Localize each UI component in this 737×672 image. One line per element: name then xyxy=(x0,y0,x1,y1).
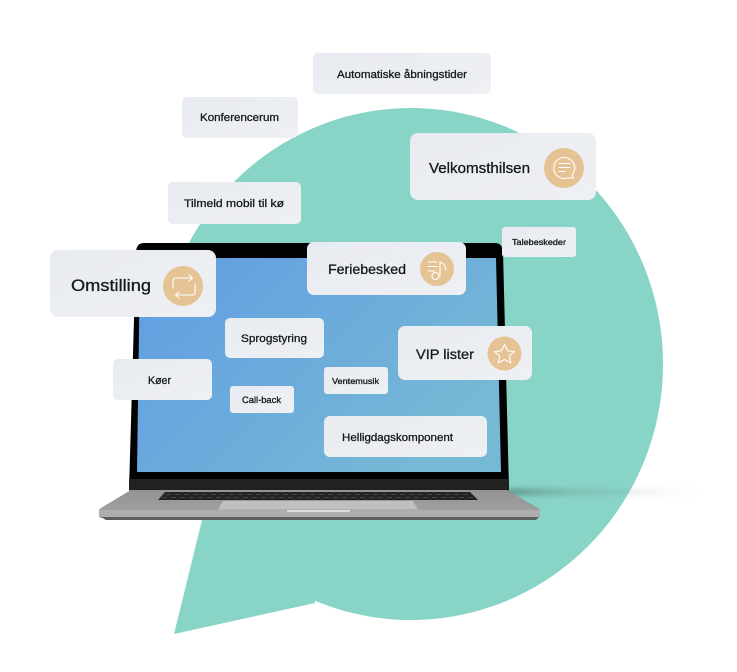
card: Call-back xyxy=(230,386,294,413)
card: Velkomsthilsen: Velkomsthilsen xyxy=(429,161,530,177)
card: VIP lister xyxy=(398,326,532,380)
card: Call-back: Call-back xyxy=(242,395,282,405)
card: Tilmeld mobil til kø: Tilmeld mobil til kø xyxy=(184,198,284,210)
keyboard keys xyxy=(162,494,474,498)
card: Tilmeld mobil til kø xyxy=(168,182,301,224)
laptop base xyxy=(99,490,540,518)
icon: transfer arrows xyxy=(163,266,203,306)
card: Helligdagskomponent xyxy=(324,416,487,457)
card: Feriebesked: Feriebesked xyxy=(328,262,406,277)
card: Talebeskeder: Talebeskeder xyxy=(512,237,566,247)
base front lip xyxy=(99,510,540,517)
card: Ventemusik: Ventemusik xyxy=(332,376,380,386)
card: Talebeskeder xyxy=(502,227,576,257)
laptop xyxy=(99,243,698,520)
card: Omstilling: Omstilling xyxy=(71,276,151,295)
card: Køer: Køer xyxy=(148,375,171,387)
card: Konferencerum xyxy=(182,97,298,138)
card: Køer xyxy=(113,359,212,400)
card: Helligdagskomponent: Helligdagskomponent xyxy=(342,432,453,444)
trackpad xyxy=(218,501,418,510)
card: Konferencerum: Konferencerum xyxy=(200,112,279,124)
icon: star xyxy=(488,336,522,370)
speech bubble background xyxy=(159,108,663,634)
base shadow xyxy=(101,517,539,520)
card: Omstilling xyxy=(50,250,216,317)
keyboard xyxy=(158,492,478,500)
card: Ventemusik xyxy=(324,367,388,394)
card: VIP lister: VIP lister xyxy=(416,347,475,362)
card: Automatiske åbningstider: Automatiske åbningstider xyxy=(337,69,467,81)
icon: playlist note xyxy=(420,252,454,286)
laptop screen xyxy=(137,258,501,472)
icon: speech bubble xyxy=(544,148,584,188)
card: Sprogstyring: Sprogstyring xyxy=(241,333,307,345)
laptop lid xyxy=(129,243,509,490)
card: Sprogstyring xyxy=(225,318,324,358)
trackpad notch xyxy=(287,510,350,512)
card: Velkomsthilsen xyxy=(410,133,596,200)
card: Feriebesked xyxy=(307,242,466,295)
laptop shadow xyxy=(508,488,698,496)
card: Automatiske åbningstider xyxy=(313,53,491,94)
laptop lower bezel xyxy=(129,479,509,491)
